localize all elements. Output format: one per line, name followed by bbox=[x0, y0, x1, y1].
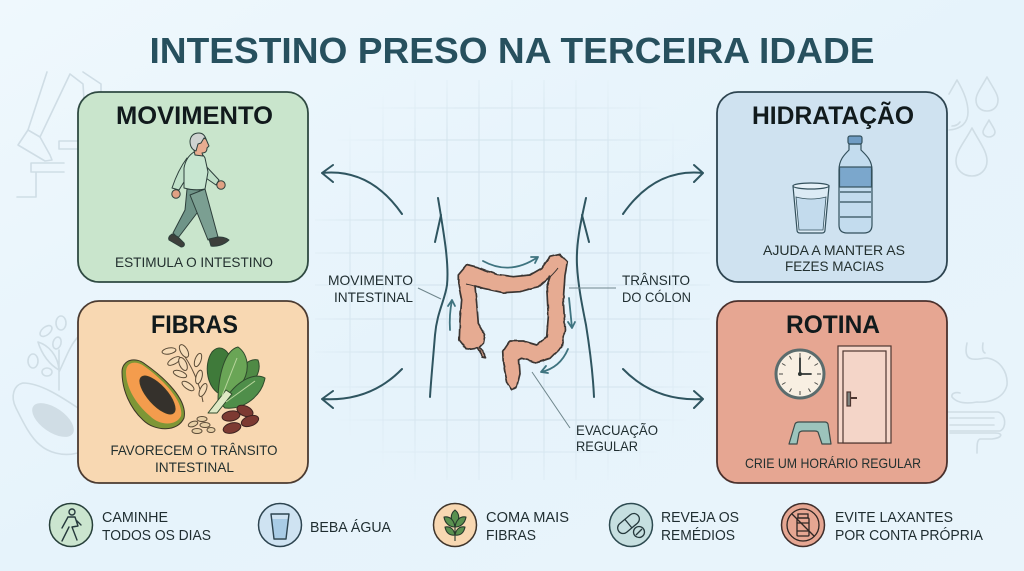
panel: fibras bbox=[78, 301, 308, 483]
text: COMA MAIS bbox=[486, 509, 569, 526]
icon: elderly man walking bbox=[169, 133, 229, 247]
diagram: colon bbox=[458, 254, 567, 389]
label: evacuacao regular bbox=[532, 372, 658, 454]
tip: laxantes bbox=[782, 504, 983, 546]
panel: movimento bbox=[78, 92, 308, 282]
decorative: stomach and intestine bbox=[948, 343, 1007, 453]
caption: hidratacao bbox=[763, 242, 905, 274]
text bbox=[661, 509, 739, 544]
icon: door bbox=[838, 346, 891, 443]
icon: crossed-out bottle bbox=[782, 504, 824, 546]
label: transito do colon bbox=[569, 272, 691, 305]
tip: fibras bbox=[434, 504, 569, 546]
text: BEBA ÁGUA bbox=[310, 519, 391, 536]
label: evacuacao regular: EVACUAÇÃO bbox=[576, 422, 658, 438]
diagram: flow arrows bbox=[448, 257, 575, 373]
text bbox=[835, 509, 983, 544]
arrow: to movimento bbox=[322, 165, 402, 214]
tip: remedios bbox=[610, 504, 739, 546]
caption: fibras: INTESTINAL bbox=[155, 459, 234, 475]
caption: rotina: CRIE UM HORÁRIO REGULAR bbox=[745, 455, 921, 471]
decorative: papaya and plant bbox=[13, 316, 80, 454]
text: POR CONTA PRÓPRIA bbox=[835, 527, 983, 544]
decorative: water drops bbox=[949, 77, 998, 176]
diagram: torso outline bbox=[430, 198, 594, 397]
icon: leaves bbox=[434, 504, 476, 546]
text: REMÉDIOS bbox=[661, 527, 735, 544]
text bbox=[486, 509, 569, 544]
label: transito do colon: TRÂNSITO bbox=[622, 272, 690, 288]
icon: papaya bbox=[122, 360, 184, 429]
panel: hidratacao bbox=[717, 92, 947, 282]
label: movimento intestinal: INTESTINAL bbox=[334, 289, 413, 305]
icon: toilet stool bbox=[789, 422, 831, 444]
tip: caminhe bbox=[50, 504, 211, 546]
caption: hidratacao: FEZES MACIAS bbox=[785, 258, 884, 274]
heading: rotina: ROTINA bbox=[786, 311, 880, 339]
label: movimento intestinal bbox=[328, 272, 441, 305]
icon: red beans bbox=[221, 403, 260, 435]
icon: oat branch bbox=[162, 343, 209, 402]
icon: walker bbox=[50, 504, 92, 546]
icon: wall clock bbox=[776, 350, 824, 398]
text: TODOS OS DIAS bbox=[102, 527, 211, 544]
text: FIBRAS bbox=[486, 527, 536, 544]
label: transito do colon: DO CÓLON bbox=[622, 289, 691, 305]
decorative: leg on stairs bbox=[17, 72, 101, 197]
text: EVITE LAXANTES bbox=[835, 509, 953, 526]
panel: rotina bbox=[717, 301, 947, 483]
icon: leafy greens bbox=[207, 347, 265, 413]
heading: movimento: MOVIMENTO bbox=[116, 102, 273, 130]
icon: water bottle bbox=[839, 136, 872, 233]
icon: pills bbox=[610, 504, 652, 546]
heading: hidratacao: HIDRATAÇÃO bbox=[752, 100, 914, 130]
text bbox=[102, 509, 211, 544]
text: CAMINHE bbox=[102, 509, 168, 526]
arrow: to hidratacao bbox=[623, 165, 703, 214]
text: REVEJA OS bbox=[661, 509, 739, 526]
arrow: to fibras bbox=[322, 369, 402, 408]
caption: hidratacao: AJUDA A MANTER AS bbox=[763, 242, 905, 258]
arrow: to rotina bbox=[623, 369, 703, 408]
heading: fibras: FIBRAS bbox=[151, 311, 238, 339]
caption: fibras: FAVORECEM O TRÂNSITO bbox=[110, 442, 278, 458]
icon: glass bbox=[258, 504, 302, 546]
caption: fibras bbox=[110, 442, 278, 475]
icon: glass of water bbox=[793, 183, 829, 233]
label: evacuacao regular: REGULAR bbox=[576, 438, 638, 454]
label: movimento intestinal: MOVIMENTO bbox=[328, 272, 413, 288]
icon: seeds bbox=[187, 416, 215, 434]
caption: movimento: ESTIMULA O INTESTINO bbox=[115, 254, 273, 270]
title: INTESTINO PRESO NA TERCEIRA IDADE bbox=[150, 30, 874, 71]
tip: beba agua bbox=[258, 504, 391, 546]
